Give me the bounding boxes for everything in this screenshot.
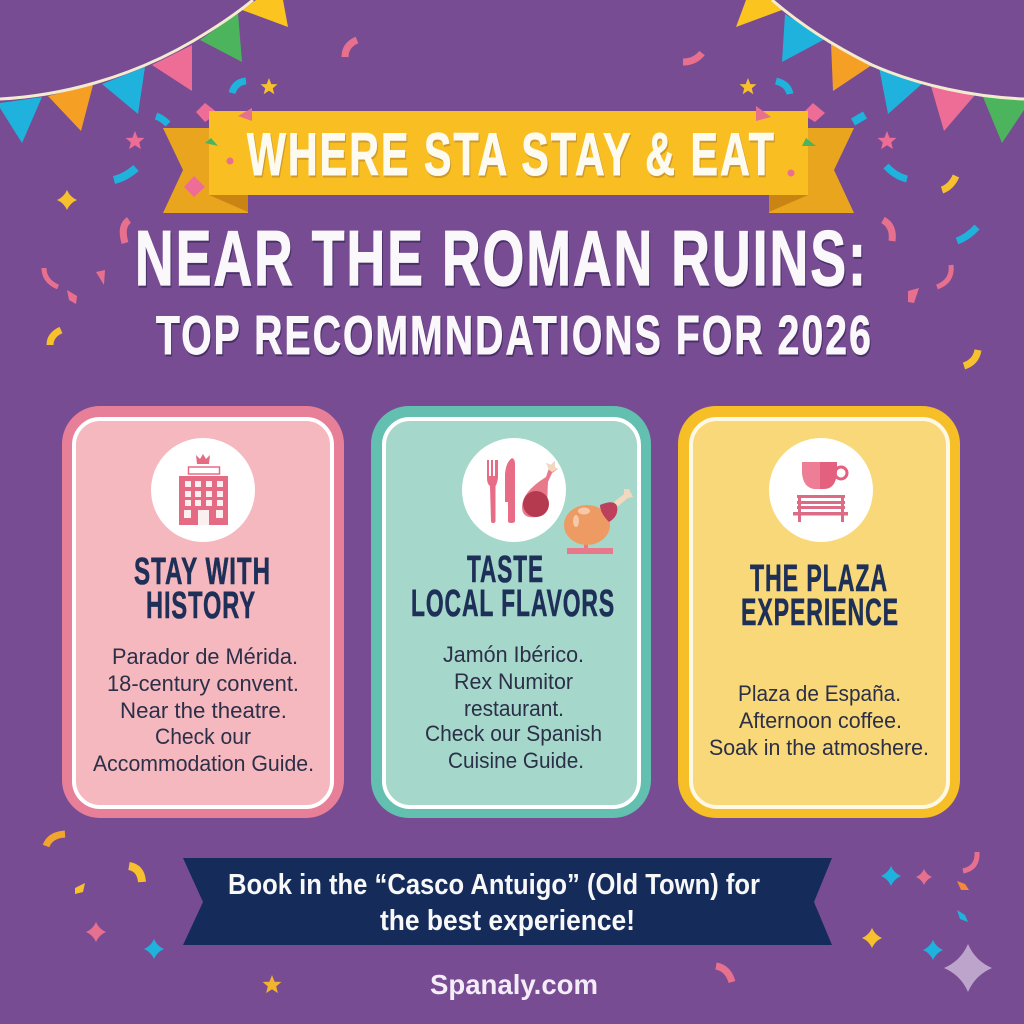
text block: Jamón Ibérico.: [443, 642, 584, 667]
text block: Afternoon coffee.: [739, 708, 902, 733]
footer website: Spanaly.com: [430, 969, 598, 1000]
icon: hotel: [151, 438, 255, 542]
text block: Check our Spanish: [425, 721, 602, 746]
heading: [741, 558, 899, 634]
heading: [134, 551, 271, 627]
panel: the plaza experience: [678, 406, 960, 818]
panel: stay with history: [62, 406, 344, 818]
text block: 18-century convent.: [107, 671, 299, 696]
text block: Cuisine Guide.: [448, 748, 584, 773]
text block: Near the theatre.: [120, 698, 287, 723]
heading: THE PLAZA: [750, 558, 888, 600]
icon: whole ham on stand: [564, 489, 633, 554]
heading: LOCAL FLAVORS: [411, 583, 615, 625]
text block: Plaza de España.: [738, 681, 901, 706]
callout text: Book in the “Casco Antuigo” (Old Town) for: [228, 869, 760, 901]
text block: Accommodation Guide.: [93, 751, 314, 776]
text block: Parador de Mérida.: [112, 644, 298, 669]
text block: restaurant.: [464, 696, 564, 721]
text block: Rex Numitor: [454, 669, 573, 694]
text block: Check our: [155, 724, 251, 749]
text block: Soak in the atmoshere.: [709, 735, 929, 760]
heading: STAY WITH: [134, 551, 271, 593]
panel: taste local flavors: [371, 406, 651, 818]
heading: EXPERIENCE: [741, 592, 899, 634]
bottom callout ribbon: [183, 858, 832, 945]
callout text: the best experience!: [380, 905, 635, 937]
text block: [709, 681, 929, 760]
callout text: [228, 869, 760, 937]
icon: coffee cup and bench: [769, 438, 873, 542]
text block: [93, 644, 314, 776]
heading: TASTE: [467, 549, 544, 591]
text block: [425, 642, 602, 773]
banner text: WHERE STA STAY & EAT: [247, 121, 776, 188]
heading: HISTORY: [146, 585, 256, 627]
top ribbon banner: [163, 106, 854, 213]
icon: cutlery and ham: [462, 438, 566, 542]
bunting: top left: [0, 0, 288, 143]
bunting: top right: [736, 0, 1024, 143]
heading: [411, 549, 615, 625]
